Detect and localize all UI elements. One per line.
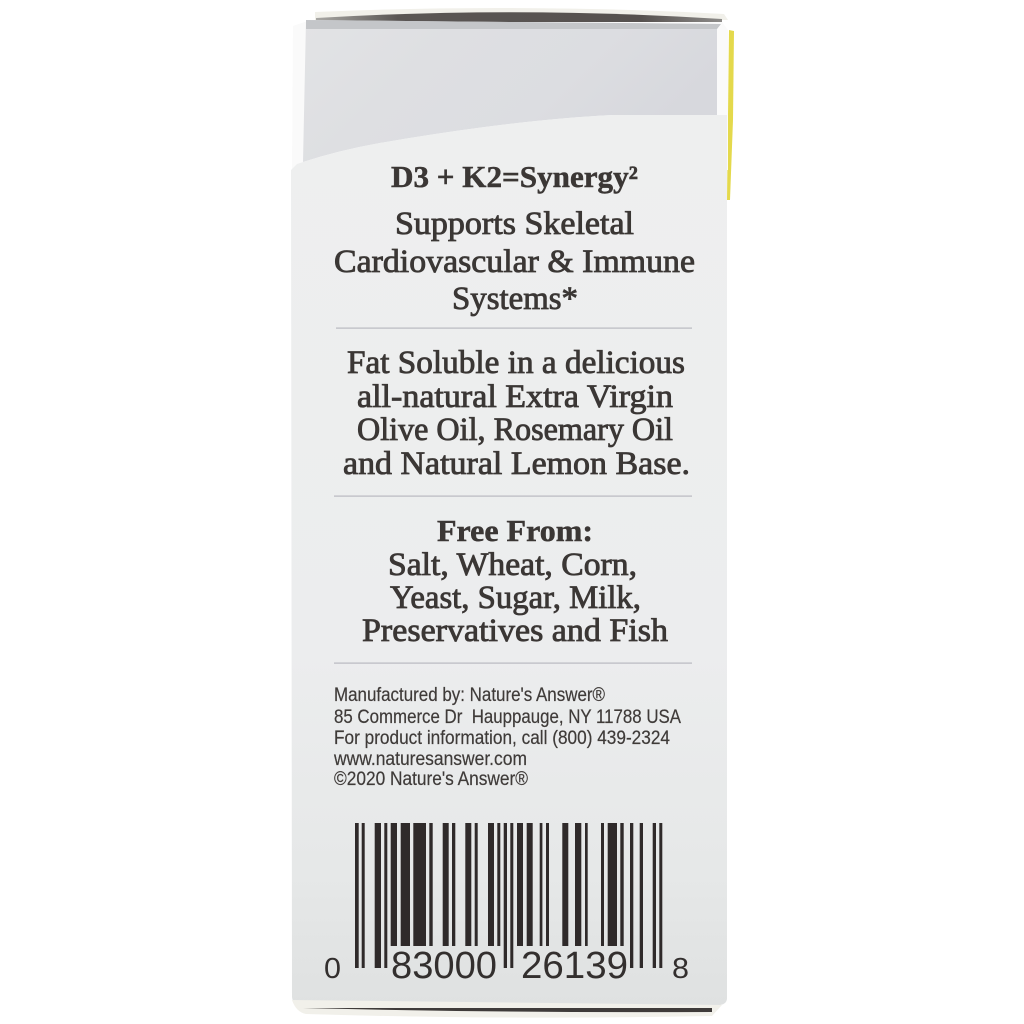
benefits text: Cardiovascular & Immune	[334, 244, 695, 280]
free from list: Salt, Wheat, Corn,	[388, 547, 637, 583]
barcode digits	[324, 945, 689, 987]
manufacturer information: 85 Commerce Dr Hauppauge, NY 11788 USA	[334, 707, 681, 728]
yellow side strip	[727, 30, 734, 200]
box top edge	[315, 8, 728, 22]
barcode	[324, 823, 689, 987]
manufacturer information: ©2020 Nature's Answer®	[334, 769, 528, 790]
benefits text: Systems*	[452, 281, 578, 317]
formula text: and Natural Lemon Base.	[343, 446, 690, 482]
barcode digits: 83000	[391, 945, 497, 987]
label panel	[291, 115, 727, 1005]
barcode digits: 26139	[521, 945, 628, 987]
manufacturer information: www.naturesanswer.com	[333, 749, 527, 770]
free from list: Yeast, Sugar, Milk,	[390, 580, 641, 616]
box bottom edge	[292, 1000, 722, 1018]
manufacturer information: Manufactured by: Nature's Answer®	[334, 685, 605, 706]
barcode bars	[355, 823, 662, 968]
free from list	[362, 547, 669, 649]
free from list: Preservatives and Fish	[362, 613, 669, 649]
formula text	[343, 345, 690, 482]
white box face top	[292, 22, 728, 170]
benefits text: Supports Skeletal	[395, 206, 634, 242]
formula text: Fat Soluble in a delicious	[347, 345, 685, 381]
benefits text	[334, 206, 695, 317]
formula text: Olive Oil, Rosemary Oil	[357, 412, 673, 448]
silver foil top	[303, 20, 717, 162]
foil crease band	[306, 20, 721, 29]
free from heading: Free From:	[437, 513, 593, 548]
manufacturer information	[333, 685, 681, 790]
barcode digits: 0	[324, 953, 341, 985]
box carton	[291, 8, 734, 1018]
heading: D3 + K2 = Synergy: D3 + K2=Synergy²	[391, 159, 638, 194]
manufacturer information: For product information, call (800) 439-2324	[334, 728, 670, 749]
barcode digits: 8	[672, 953, 689, 985]
formula text: all-natural Extra Virgin	[357, 379, 673, 415]
